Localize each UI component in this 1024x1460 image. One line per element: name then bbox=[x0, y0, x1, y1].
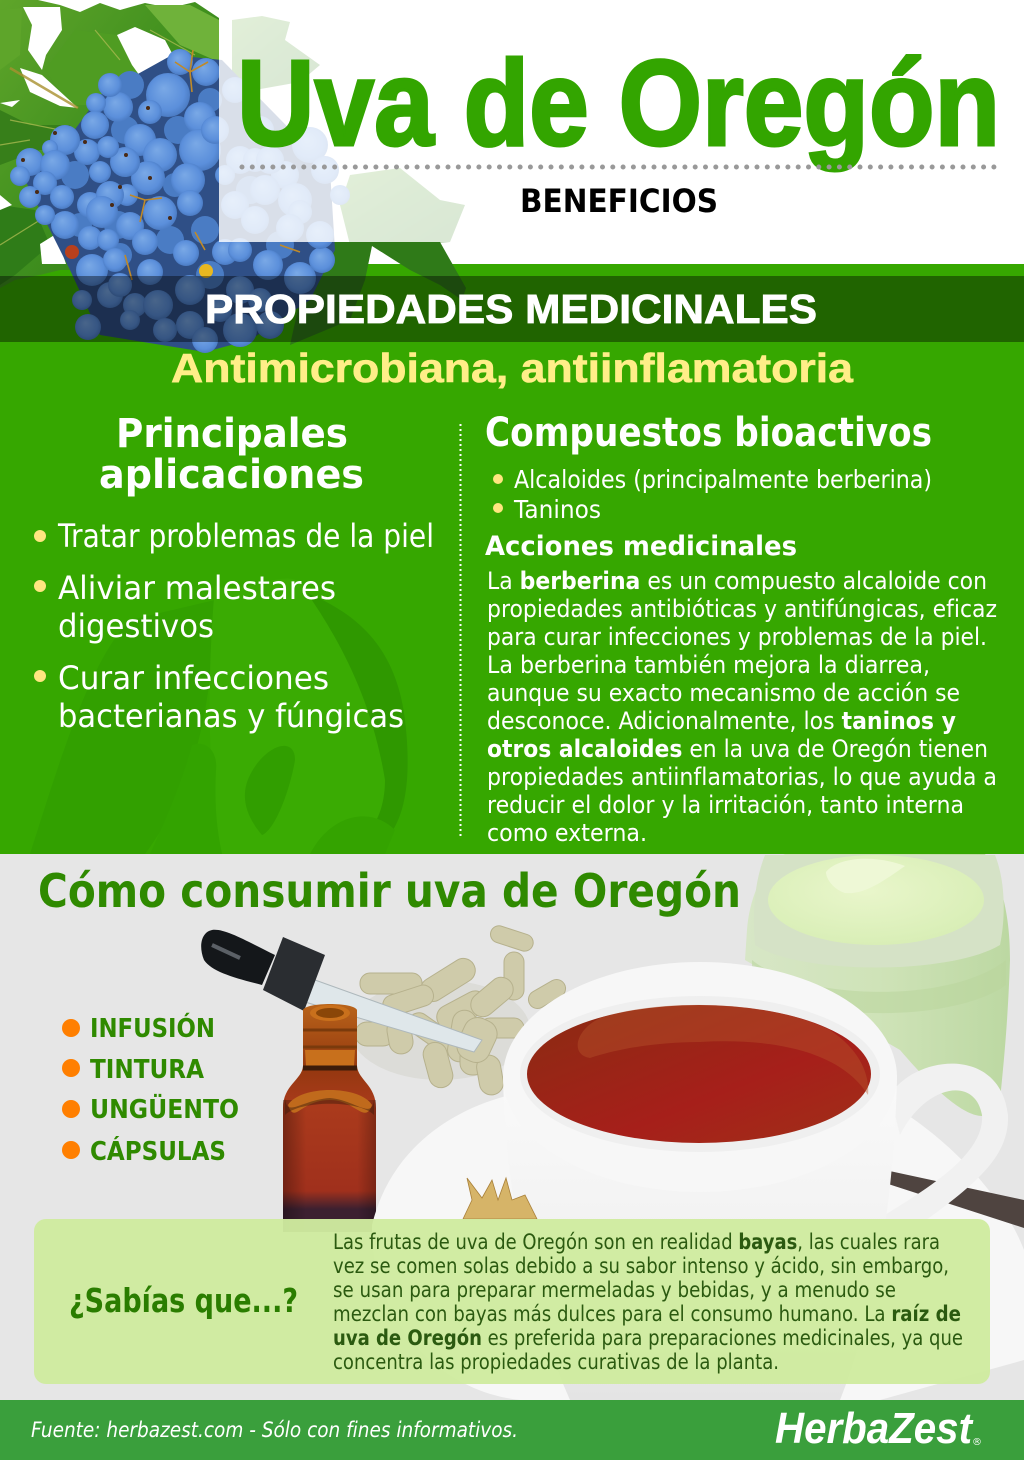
compound list: Alcaloides (principalmente berberina) bbox=[514, 465, 932, 494]
callout text bbox=[333, 1230, 963, 1374]
illustration: Oregon grape leaves and berries bbox=[0, 0, 466, 353]
illustration: faded hand holding elbow bbox=[30, 579, 408, 854]
illustration: spoon bbox=[885, 1170, 1024, 1228]
medicinal actions paragraph: otros alcaloides en la uva de Oregón tienen bbox=[487, 735, 988, 763]
back berries bbox=[61, 71, 294, 289]
callout text: uva de Oregón es preferida para preparaciones medicinales, ya que bbox=[333, 1326, 963, 1350]
medicinal actions paragraph: La berberina es un compuesto alcaloide con bbox=[487, 567, 987, 595]
capsule pile bbox=[355, 924, 569, 1097]
heading: medicinal actions: Acciones medicinales bbox=[485, 531, 797, 562]
illustration: dropper bbox=[201, 930, 482, 1052]
consumption labels: UNGÜENTO bbox=[90, 1092, 239, 1125]
illustration: cream jar bbox=[745, 854, 1010, 1116]
consumption labels bbox=[90, 1012, 239, 1167]
consumption labels: INFUSIÓN bbox=[90, 1012, 215, 1044]
white gaps between leaves bbox=[0, 7, 182, 264]
dotted column divider bbox=[460, 424, 462, 838]
yellow berry bbox=[199, 264, 213, 278]
list: forms of consumption bbox=[62, 1012, 239, 1167]
application list bbox=[57, 517, 434, 735]
application list: Aliviar malestares bbox=[58, 569, 336, 607]
callout text: concentra las propiedades curativas de la planta. bbox=[333, 1350, 779, 1374]
application bullets bbox=[34, 530, 46, 682]
application list: Tratar problemas de la piel bbox=[57, 517, 434, 555]
medicinal actions paragraph: desconoce. Adicionalmente, los taninos y bbox=[487, 707, 956, 735]
illustration: tea cup bbox=[503, 962, 1008, 1400]
medicinal actions paragraph: reducir el dolor y la irritación, tanto interna bbox=[487, 791, 964, 819]
subtitle: BENEFICIOS bbox=[520, 182, 718, 220]
section subheading: Antimicrobiana, antiinflamatoria bbox=[171, 345, 854, 391]
heading: main applications: aplicaciones bbox=[99, 452, 364, 498]
source note: Fuente: herbazest.com - Sólo con fines informativos. bbox=[31, 1418, 518, 1442]
leaves bbox=[0, 0, 466, 345]
heading: main applications bbox=[99, 411, 364, 498]
orange bullets bbox=[62, 1019, 80, 1159]
callout text: Las frutas de uva de Oregón son en realidad bayas, las cuales rara bbox=[333, 1230, 940, 1254]
panel: main applications bbox=[34, 411, 434, 735]
callout heading: ¿Sabías que...? bbox=[69, 1281, 298, 1320]
panel: green medicinal properties background bbox=[0, 264, 1024, 854]
section heading: how to consume: Cómo consumir uva de Oregón bbox=[38, 864, 741, 918]
berry stems bbox=[125, 50, 300, 280]
heading: bioactive compounds: Compuestos bioactivos bbox=[485, 410, 932, 456]
illustration: tincture bottle bbox=[283, 1004, 376, 1232]
dark band behind section title bbox=[0, 276, 1024, 342]
capsule shadow bbox=[350, 980, 530, 1080]
medicinal actions paragraph: La berberina también mejora la diarrea, bbox=[487, 651, 930, 679]
medicinal actions paragraph: para curar infecciones y problemas de la piel. bbox=[487, 623, 987, 651]
berries bbox=[10, 49, 350, 353]
application list: bacterianas y fúngicas bbox=[58, 697, 404, 735]
registered mark: ® bbox=[972, 1437, 982, 1448]
callout text: mezclan con bayas más dulces para el consumo humano. La raíz de bbox=[333, 1302, 961, 1326]
compound list: Taninos bbox=[513, 495, 601, 524]
footer bbox=[0, 1400, 1024, 1460]
medicinal actions paragraph: aunque su exacto mecanismo de acción se bbox=[487, 679, 960, 707]
white wash over title area bbox=[219, 15, 1024, 242]
compound bullets bbox=[493, 474, 503, 513]
red berry bbox=[65, 245, 79, 259]
dark cluster core bbox=[25, 55, 335, 352]
medicinal actions paragraph bbox=[487, 567, 997, 847]
compound list bbox=[513, 465, 932, 524]
panel: how to consume background bbox=[0, 854, 1024, 1400]
medicinal actions paragraph: propiedades antiinflamatorias, lo que ayuda a bbox=[487, 763, 997, 791]
medicinal actions paragraph: como externa. bbox=[487, 819, 647, 847]
dotted title divider bbox=[242, 164, 1000, 170]
panel: bioactive compounds and medicinal actions bbox=[485, 410, 997, 847]
illustration: saucer bbox=[372, 1095, 1024, 1400]
consumption labels: CÁPSULAS bbox=[90, 1135, 226, 1167]
application list: digestivos bbox=[58, 607, 214, 645]
illustration: capsules bbox=[350, 924, 569, 1097]
leaf veins bbox=[0, 30, 195, 245]
callout: did you know bbox=[34, 1219, 990, 1384]
callout text: se usan para preparar mermeladas y bebidas, y a menudo se bbox=[333, 1278, 896, 1302]
section heading: medicinal properties: PROPIEDADES MEDICINALES bbox=[205, 286, 817, 332]
berry calyx dots bbox=[21, 106, 172, 220]
consumption labels: TINTURA bbox=[90, 1055, 204, 1085]
heading: main applications: Principales bbox=[116, 411, 348, 457]
illustration: dried herb bbox=[463, 1178, 537, 1219]
callout panel bbox=[34, 1219, 990, 1384]
application list: Curar infecciones bbox=[58, 659, 329, 697]
logo: HerbaZest: HerbaZest bbox=[775, 1404, 974, 1453]
footer bar bbox=[0, 1400, 1024, 1460]
